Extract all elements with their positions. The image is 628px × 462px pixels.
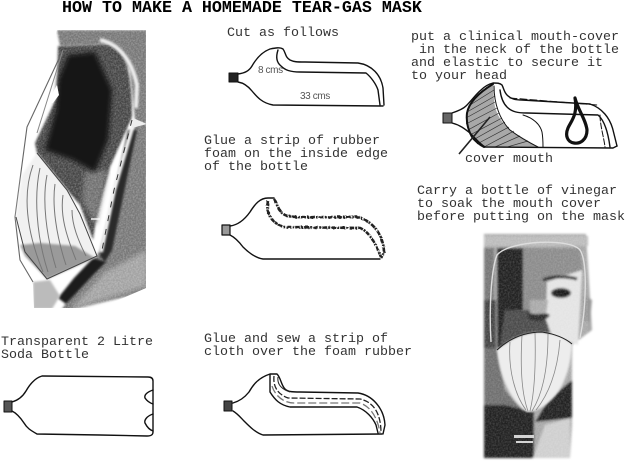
label: clinical mouth cover: and elastic to secure it — [411, 56, 603, 71]
dark face core — [45, 52, 112, 172]
bottle outline — [490, 242, 585, 342]
photo: front view of person wearing bottle mask — [484, 234, 592, 458]
lower left — [484, 348, 534, 458]
label: cloth strip: cloth over the foam rubber — [204, 345, 412, 360]
label: rubber foam: of the bottle — [204, 160, 308, 175]
bottle: cloth strip — [224, 374, 385, 435]
label: cloth strip: Glue and sew a strip of — [204, 332, 388, 347]
label: soda bottle: Transparent 2 Litre — [1, 335, 153, 350]
elastic loop — [567, 98, 587, 143]
dark edge behind bottle — [100, 130, 137, 262]
top band and right background — [57, 30, 147, 312]
label: vinegar: to soak the mouth cover — [417, 197, 601, 212]
base tones — [484, 234, 592, 458]
bottle edges — [15, 50, 63, 282]
shadow under mask — [58, 258, 106, 304]
ear — [583, 295, 592, 322]
bottle: rubber foam strip — [222, 198, 384, 259]
dimension: 8 cms: 8 cms — [258, 65, 283, 76]
bottle: transparent 2 litre soda bottle — [4, 376, 153, 436]
bright skin — [546, 270, 582, 345]
mouth cover hatching — [467, 84, 538, 147]
label: vinegar: Carry a bottle of vinegar — [417, 184, 617, 199]
brow — [543, 277, 577, 280]
label: soda bottle: Soda Bottle — [1, 348, 89, 363]
label: cover mouth: cover mouth — [465, 152, 553, 167]
mouth cover — [497, 332, 572, 412]
eye — [551, 288, 571, 298]
label: clinical mouth cover: in the neck of the bottle — [419, 43, 619, 58]
bottle base — [33, 280, 60, 309]
shadow right of mask — [535, 380, 572, 422]
bottle: mouth cover and elastic — [443, 83, 617, 167]
arrow: pointer to cover mouth — [459, 117, 490, 154]
bottle neck — [514, 435, 534, 443]
label: vinegar: before putting on the mask — [417, 210, 625, 225]
nose — [527, 312, 550, 321]
left strip — [484, 248, 494, 350]
label: cut as follows: Cut as follows — [227, 26, 339, 41]
label: clinical mouth cover: to your head — [411, 69, 507, 84]
photo: profile of person wearing bottle mask — [10, 28, 150, 313]
shaded side of face — [497, 248, 524, 348]
dimension: 33 cms: 33 cms — [300, 91, 330, 102]
label: rubber foam: foam on the inside edge — [204, 147, 388, 162]
label: clinical mouth cover: put a clinical mouth-cover — [411, 30, 619, 45]
label: rubber foam: Glue a strip of rubber — [204, 134, 380, 149]
mouth cover — [16, 153, 97, 279]
light collar — [533, 418, 570, 458]
bottle: cut shape with dimensions — [229, 48, 384, 106]
speckled face — [35, 44, 132, 240]
